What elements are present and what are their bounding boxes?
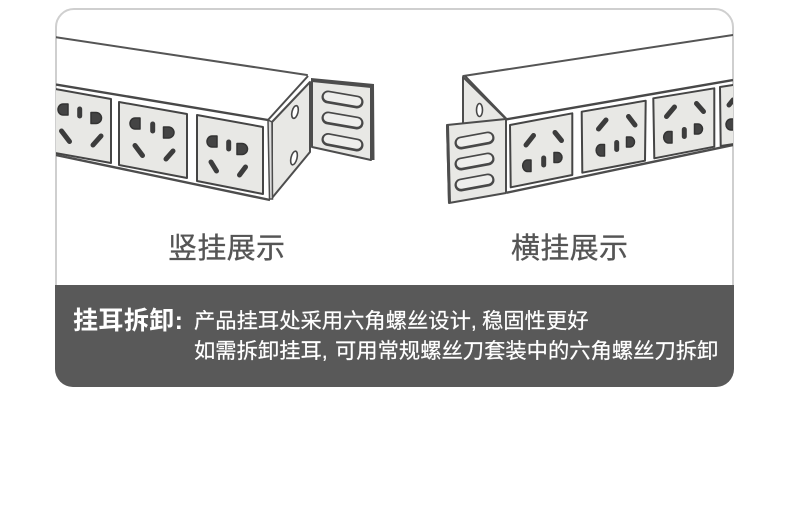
caption text line 1: 产品挂耳处采用六角螺丝设计, [194,309,477,333]
socket 1 [510,113,572,187]
label: horizontal mounting: 横挂展示 [511,232,628,265]
illustration: vertical mounting power strip [50,37,308,200]
caption text line 2: 如需拆卸挂耳, [194,339,328,363]
caption heading: 挂耳拆卸: [73,307,183,335]
strip body [463,35,733,76]
panel: rounded card [56,9,733,386]
ear plate [312,81,371,160]
panel: dark caption band [55,285,734,387]
ear plate [447,119,506,203]
socket 1 [50,88,111,163]
ear shadow [311,78,374,160]
socket 2 [119,102,187,178]
illustration: horizontal mounting power strip [463,35,740,193]
socket 2 [582,101,646,173]
side plate and ear: right bracket [447,76,506,203]
socket 4 [719,84,733,146]
side plate and ear: left bracket [268,78,374,199]
caption text line 2: 可用常规螺丝刀套装中的六角螺丝刀拆卸 [335,339,718,363]
bracket screw hole [476,104,482,116]
infographic canvas [55,8,734,387]
strip body [56,37,307,75]
caption text line 1: 稳固性更好 [482,309,588,333]
socket 3 [653,88,714,158]
label: vertical mounting: 竖挂展示 [168,232,285,265]
socket 3 [197,115,263,194]
bracket screw holes [291,105,299,119]
